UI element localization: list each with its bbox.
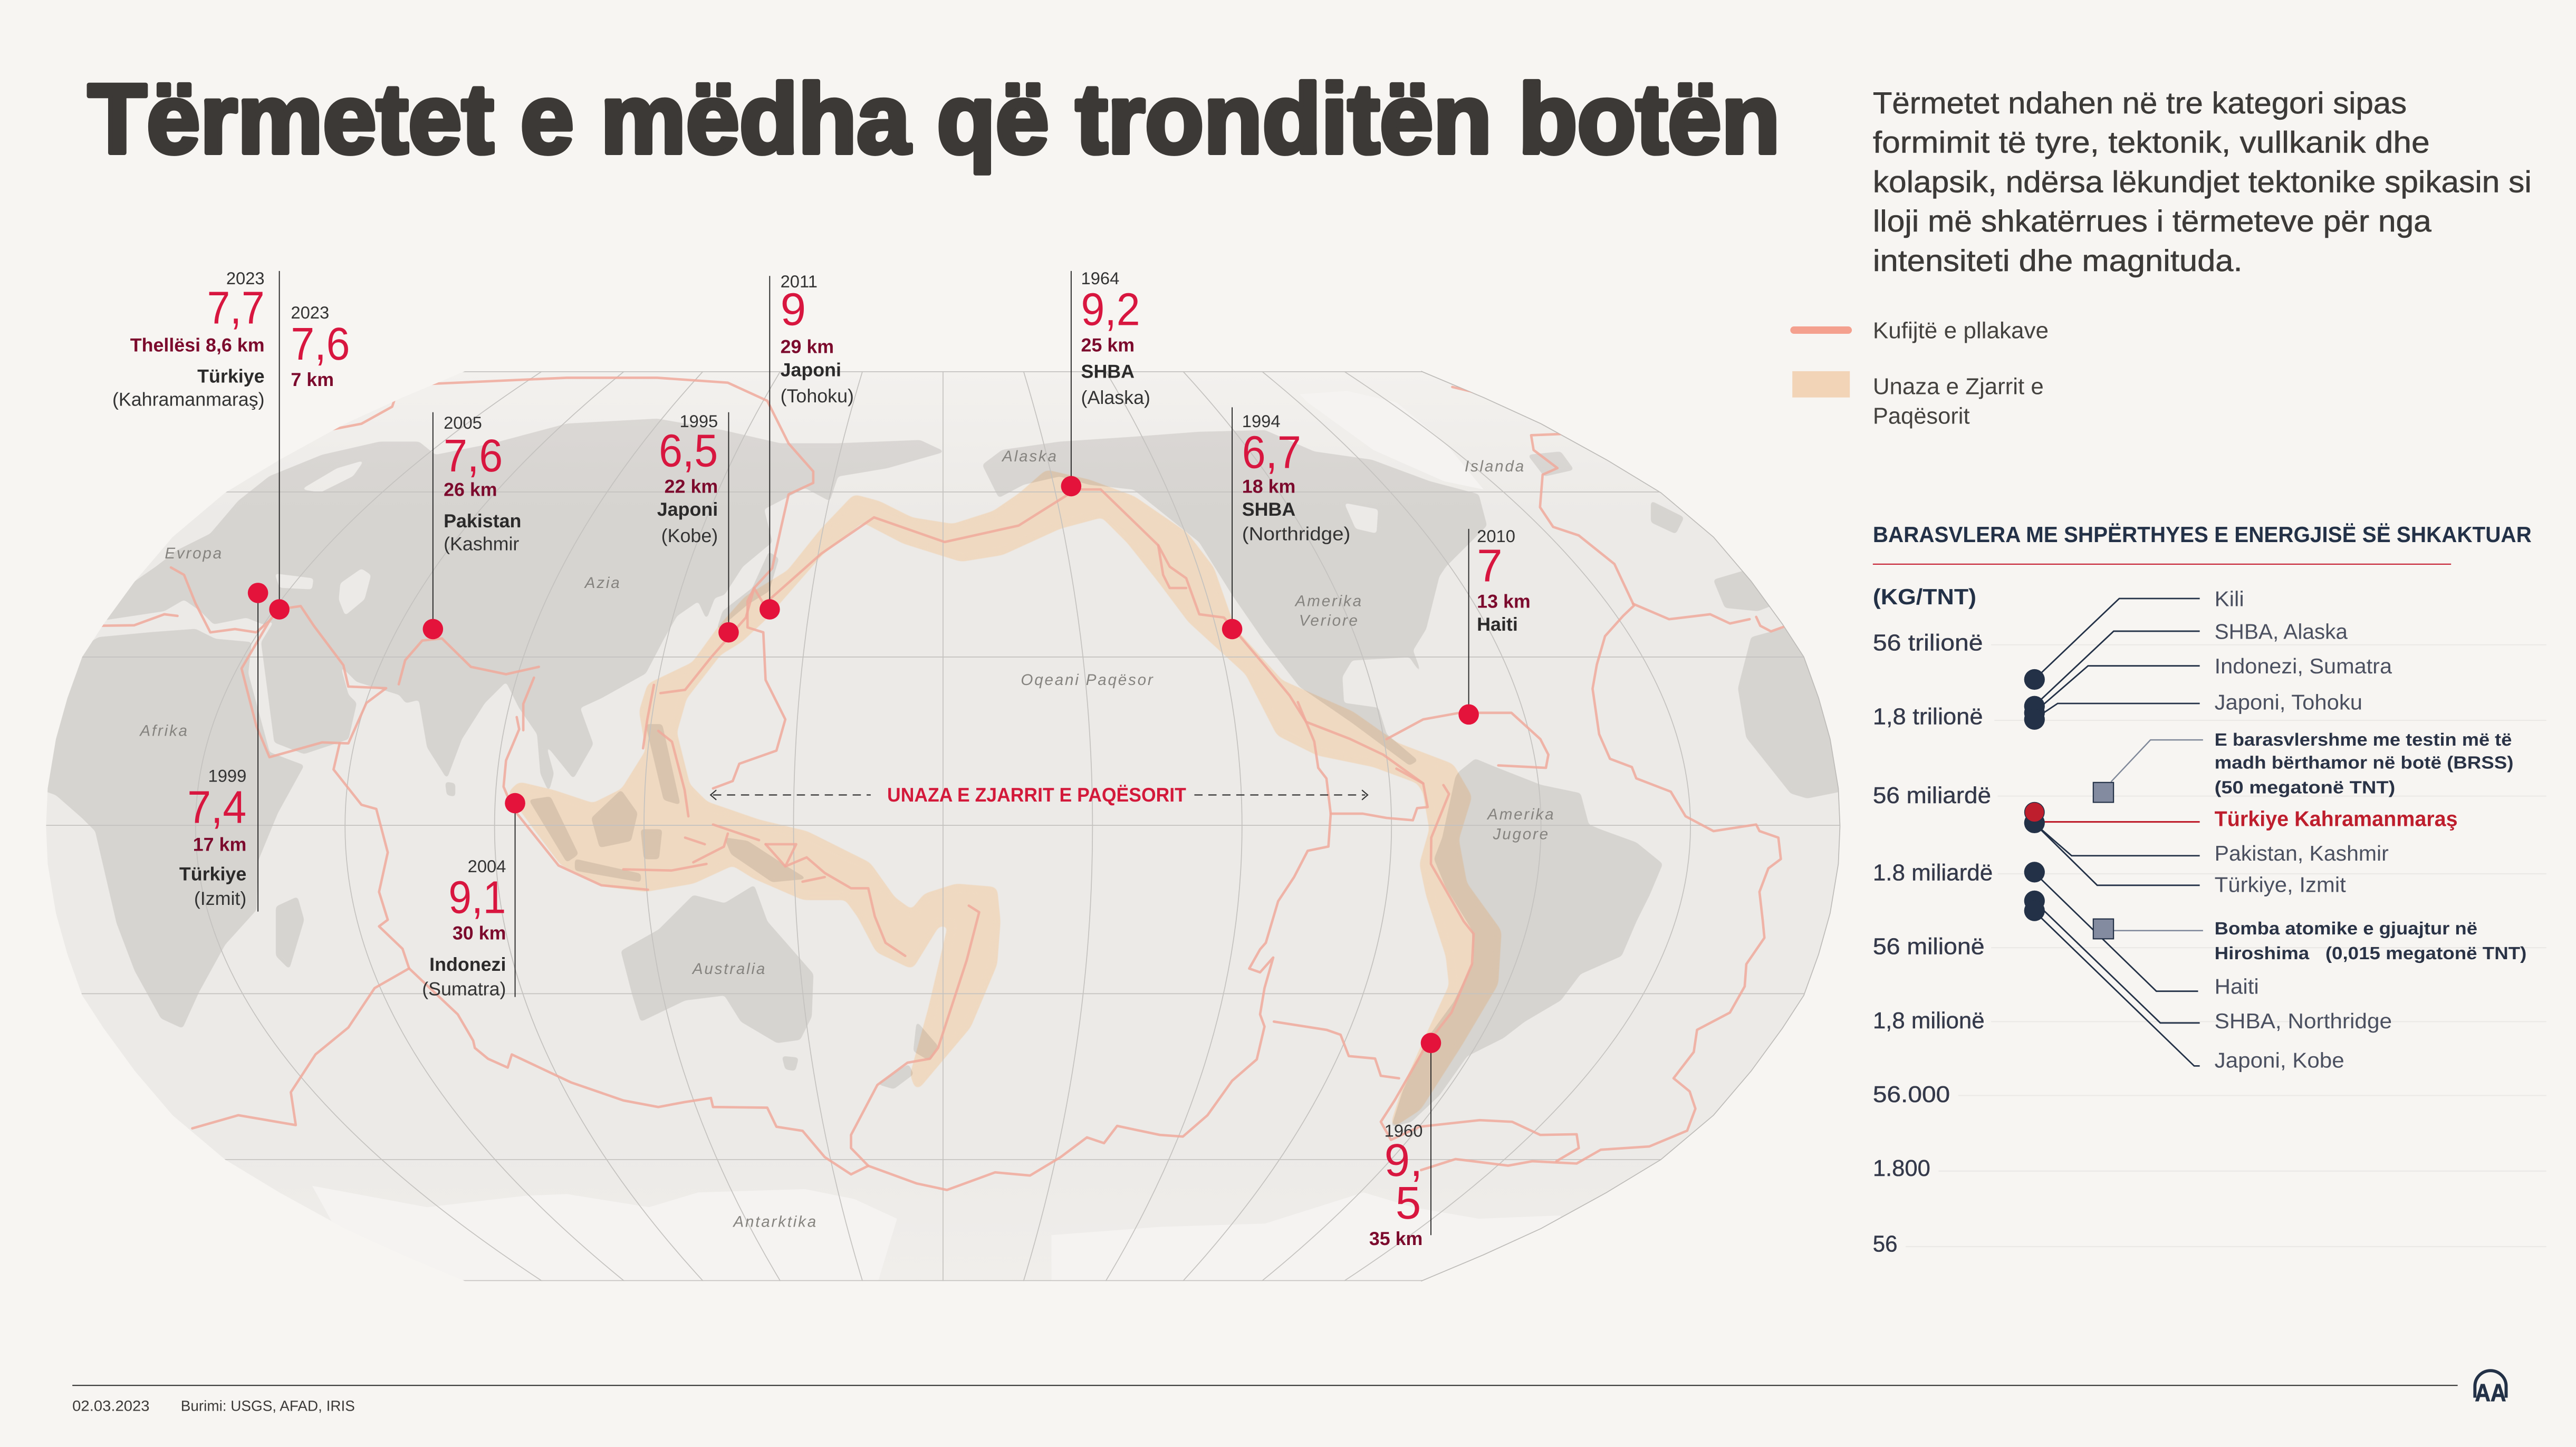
value axis labels: 56 miliardë <box>1873 782 1992 808</box>
pin: Chile: 1960 <box>1385 1122 1423 1142</box>
value axis labels: 56 <box>1873 1230 1898 1257</box>
chart event labels: SHBA, Northridge <box>2215 1008 2392 1033</box>
pin: Japan Kobe: 6,5 <box>659 426 718 476</box>
map region labels: Afrika <box>138 722 189 741</box>
pin: Türkiye Kahramanmaraş 7,7: Thellësi 8,6 km <box>130 337 265 356</box>
map region labels: Australia <box>691 961 766 979</box>
map region labels: Veriore <box>1299 613 1359 631</box>
pin: Türkiye Kahramanmaraş 7,7: 7,7 <box>207 283 265 333</box>
value axis labels: 1.800 <box>1873 1155 1930 1181</box>
pin: Türkiye Kahramanmaraş 7,7: (Kahramanmaraş) <box>112 391 265 411</box>
ice sheets <box>312 476 1483 1212</box>
intro paragraph: lloji më shkatërrues i tërmeteve për nga <box>1873 204 2433 238</box>
chart event labels: SHBA, Alaska <box>2215 619 2349 644</box>
chart event labels: Pakistan, Kashmir <box>2215 841 2390 865</box>
pin: Türkiye Izmit: (Izmit) <box>194 890 247 910</box>
pin: Pakistan Kashmir: 26 km <box>444 481 497 501</box>
Soviet test note: (50 megatonë TNT) <box>2215 778 2396 798</box>
chart event labels: Türkiye, Izmit <box>2215 872 2347 897</box>
Hiroshima note <box>2215 920 2527 964</box>
value axis labels: 1,8 milionë <box>1873 1007 1985 1033</box>
pin: Indonesia Sumatra: (Sumatra) <box>422 980 506 1000</box>
legend: plate boundaries: Kufijtë e pllakave <box>1873 317 2049 343</box>
chart event labels: Japoni, Kobe <box>2215 1048 2344 1073</box>
pin: Türkiye Izmit <box>179 583 268 912</box>
pin: Chile: 5 <box>1396 1178 1421 1229</box>
value axis labels: 1,8 trilionë <box>1873 703 1983 729</box>
pin: USA Alaska: 1964 <box>1081 269 1120 289</box>
map region labels: Antarktika <box>732 1214 818 1232</box>
map region labels: Islanda <box>1465 458 1525 476</box>
map region labels: Evropa <box>165 545 223 563</box>
chart event labels: Kili <box>2215 586 2244 611</box>
map region labels: Amerika <box>1294 593 1363 611</box>
pin: Pakistan Kashmir: (Kashmir <box>444 535 520 555</box>
Hiroshima note: Bomba atomike e gjuajtur në <box>2215 920 2477 940</box>
pin: Haiti: 13 km <box>1477 593 1531 613</box>
pin: Türkiye Kahramanmaraş 7,6 <box>291 304 350 391</box>
pin: Türkiye Kahramanmaraş 7,6: 2023 <box>291 304 330 324</box>
map region labels: Jugore <box>1492 826 1550 844</box>
map base <box>46 371 1840 1281</box>
pin: Indonesia Sumatra: 9,1 <box>448 872 506 923</box>
pin: USA Alaska: 9,2 <box>1081 284 1140 335</box>
title: Tërmetet e mëdha që tronditën botën <box>88 64 1780 174</box>
pin: Türkiye Kahramanmaraş 7,7 <box>112 269 290 620</box>
footer date: 02.03.2023 <box>72 1398 150 1414</box>
map region labels: Azia <box>583 575 621 593</box>
legend: ring of fire: Paqësorit <box>1873 402 1970 429</box>
pin: USA Northridge: 1994 <box>1242 412 1281 432</box>
pin: Pakistan Kashmir: Pakistan <box>444 513 521 532</box>
pin: Pakistan Kashmir <box>423 412 521 639</box>
value axis labels <box>1873 629 1993 1257</box>
intro paragraph <box>1873 85 2532 277</box>
pin: USA Northridge: (Northridge) <box>1242 526 1351 545</box>
legend: ring of fire <box>1792 371 2044 429</box>
pin: Chile <box>1369 1033 1441 1250</box>
map region labels <box>138 448 1555 1232</box>
pin: USA Northridge: 6,7 <box>1242 427 1301 478</box>
tectonic plate boundaries <box>99 378 1786 1190</box>
footer source: Burimi: USGS, AFAD, IRIS <box>181 1398 355 1414</box>
pin: Türkiye Izmit: Türkiye <box>179 865 246 885</box>
intro paragraph: intensiteti dhe magnituda. <box>1873 243 2243 277</box>
map region labels: Amerika <box>1486 806 1555 825</box>
chart event labels: Japoni, Tohoku <box>2215 690 2362 715</box>
pin: USA Alaska <box>1061 269 1150 496</box>
footer <box>72 1371 2506 1414</box>
map region labels: Alaska <box>1001 448 1058 467</box>
pin: Haiti: Haiti <box>1477 616 1518 635</box>
pin: Haiti: 2010 <box>1477 527 1515 547</box>
legend: ring of fire: Unaza e Zjarrit e <box>1873 373 2044 399</box>
reference squares <box>2093 783 2113 939</box>
pin: Japan Tohoku: 2011 <box>781 273 818 292</box>
ring of fire band <box>510 471 1500 1127</box>
connector lines <box>2034 599 2203 1066</box>
land masses <box>33 419 1857 1127</box>
ring of fire callout <box>710 784 1368 806</box>
pin: Japan Tohoku <box>760 273 854 620</box>
pin: Türkiye Izmit: 1999 <box>208 767 247 787</box>
chart heading: BARASVLERA ME SHPËRTHYES E ENERGJISË SË SHKAKTUAR <box>1873 522 2532 547</box>
chart event labels <box>2215 586 2393 1073</box>
icon: AA logo <box>2475 1371 2506 1407</box>
pin: Türkiye Izmit: 7,4 <box>187 782 246 833</box>
pin: Japan Kobe: 1995 <box>679 412 718 432</box>
pin: USA Northridge: SHBA <box>1242 501 1295 520</box>
pin: Japan Tohoku: Japoni <box>781 361 841 381</box>
Soviet test note: madh bërthamor në botë (BRSS) <box>2215 754 2514 774</box>
pin: USA Alaska: (Alaska) <box>1081 389 1150 409</box>
chart event labels: Haiti <box>2215 974 2259 999</box>
pin: Türkiye Kahramanmaraş 7,6: 7 km <box>291 371 334 391</box>
pin: Japan Kobe: 22 km <box>665 478 718 498</box>
pin: Japan Kobe: Japoni <box>657 501 718 520</box>
pin: USA Alaska: 25 km <box>1081 337 1135 356</box>
chart unit: (KG/TNT) <box>1873 585 1976 610</box>
Soviet test note: E barasvlershme me testin më të <box>2215 731 2512 750</box>
value axis labels: 1.8 miliardë <box>1873 859 1993 885</box>
pin: USA Alaska: SHBA <box>1081 363 1135 383</box>
panel: energy equivalence chart <box>1873 522 2546 1257</box>
pin: Indonesia Sumatra: 2004 <box>468 857 506 877</box>
pin: Haiti: 7 <box>1477 541 1503 591</box>
pin: USA Northridge: 18 km <box>1242 478 1295 498</box>
intro paragraph: formimit të tyre, tektonik, vullkanik dhe <box>1873 125 2430 159</box>
pin: Indonesia Sumatra: Indonezi <box>429 956 506 976</box>
pin: Indonesia Sumatra <box>422 793 525 1000</box>
pin: Japan Tohoku: (Tohoku) <box>781 388 854 407</box>
pin: Türkiye Kahramanmaraş 7,7: Türkiye <box>197 368 265 388</box>
icon: AA logo: AA <box>2475 1380 2506 1407</box>
map region labels: Oqeani Paqësor <box>1021 672 1155 690</box>
pin: Pakistan Kashmir: 7,6 <box>444 430 503 481</box>
pin: Japan Tohoku: 29 km <box>781 339 834 358</box>
pin: Haiti <box>1458 527 1531 725</box>
pin: Pakistan Kashmir: 2005 <box>444 414 482 433</box>
pin: Japan Tohoku: 9 <box>781 284 806 335</box>
pin: Indonesia Sumatra: 30 km <box>453 925 506 944</box>
intro paragraph: kolapsik, ndërsa lëkundjet tektonike spikasin si <box>1873 164 2532 199</box>
pin: Chile: 9, <box>1385 1135 1422 1186</box>
pin: USA Northridge <box>1222 407 1351 639</box>
pin: Türkiye Kahramanmaraş 7,7: 2023 <box>226 269 265 289</box>
pin: Chile: 35 km <box>1369 1230 1422 1250</box>
data dots <box>2024 669 2045 921</box>
Hiroshima note: Hiroshima (0,015 megatonë TNT) <box>2215 944 2527 964</box>
pin: Türkiye Izmit: 17 km <box>193 836 246 856</box>
pin: Türkiye Kahramanmaraş 7,6: 7,6 <box>291 319 350 370</box>
highlighted label: Türkiye Kahramanmaraş <box>2215 806 2458 831</box>
value axis labels: 56.000 <box>1873 1081 1950 1107</box>
value axis labels: 56 trilionë <box>1873 629 1983 655</box>
ring of fire callout: UNAZA E ZJARRIT E PAQËSORIT <box>887 784 1187 806</box>
world map <box>33 371 1857 1306</box>
graticule <box>33 371 1857 1281</box>
Soviet test note <box>2215 731 2514 798</box>
chart event labels: Indonezi, Sumatra <box>2215 654 2393 678</box>
legend <box>1792 317 2049 429</box>
pin: Japan Kobe: (Kobe) <box>661 527 718 547</box>
pin: Japan Kobe <box>657 412 739 642</box>
value axis labels: 56 milionë <box>1873 933 1985 959</box>
intro paragraph: Tërmetet ndahen në tre kategori sipas <box>1873 85 2407 120</box>
